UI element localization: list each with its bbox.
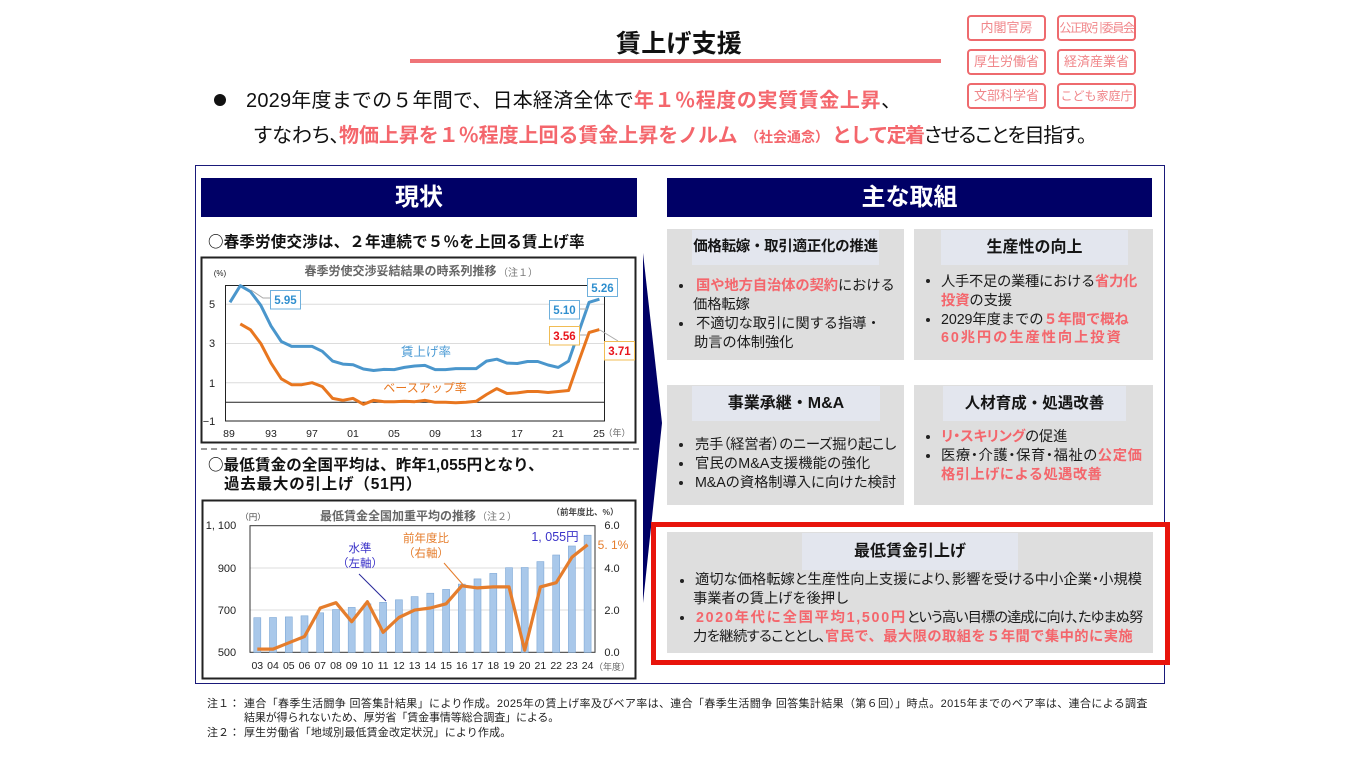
callout: 5.95: 5.95 xyxy=(274,295,297,307)
footnotes xyxy=(207,698,1148,738)
x axis labels: 03 xyxy=(251,660,263,672)
y axis labels xyxy=(203,269,227,428)
tag: education xyxy=(967,83,1046,109)
x axis labels: 10 xyxy=(362,660,373,672)
x axis labels: 06 xyxy=(299,660,310,672)
left axis labels: 700 xyxy=(218,605,236,617)
annotation: year-on-year, right axis: 前年度比 xyxy=(403,531,449,545)
lead line 2: （社会通念） xyxy=(745,129,829,145)
bullet xyxy=(926,435,930,439)
header: main initiatives: 主な取組 xyxy=(862,184,958,211)
x axis labels: 22 xyxy=(550,660,562,672)
note 2: 厚生労働省「地域別最低賃金改定状況」により作成。 xyxy=(244,726,511,738)
lead line 2: させることを目指す。 xyxy=(924,125,1085,147)
x axis labels: 21 xyxy=(535,660,546,672)
text: 格引上げによる処遇改善 xyxy=(941,467,1102,483)
x axis labels: 13 xyxy=(470,428,482,440)
x axis labels: 20 xyxy=(519,660,531,672)
line chart: spring wage negotiation results xyxy=(200,256,636,444)
panel heading xyxy=(941,230,1128,265)
bullet xyxy=(679,443,683,447)
panel heading: 最低賃金引上げ xyxy=(854,543,966,560)
x axis labels: 09 xyxy=(346,660,358,672)
x axis labels: 21 xyxy=(552,428,564,440)
panel heading xyxy=(943,386,1126,421)
y axis labels: −1 xyxy=(203,416,215,428)
x axis labels: 18 xyxy=(487,660,499,672)
callout: 5.95 xyxy=(270,290,300,309)
text: 60兆円の生産性向上投資 xyxy=(941,330,1123,346)
text: M&Aの資格制導入に向けた検討 xyxy=(695,475,896,491)
heading: minimum wage: ○最低賃金の全国平均は、昨年1,055円となり、 xyxy=(208,453,544,475)
x axis labels: 24 xyxy=(582,660,594,672)
text: 国や地方自治体の契約における xyxy=(696,278,895,294)
header: main initiatives xyxy=(667,178,1152,217)
x axis labels: 15 xyxy=(440,660,452,672)
title: 賃上げ支援 xyxy=(616,30,742,58)
x axis labels: 89 xyxy=(223,428,235,440)
note 1 continuation: 結果が得られないため、厚労省「賃金事情等総合調査」による。 xyxy=(244,712,559,724)
title underline xyxy=(410,59,941,63)
tag: health and labour xyxy=(967,49,1046,75)
bullet xyxy=(926,279,930,283)
x axis labels: （年） xyxy=(603,427,631,438)
heading: minimum wage: 過去最大の引上げ（51円） xyxy=(224,476,422,493)
x axis labels xyxy=(251,660,630,672)
panel: productivity xyxy=(914,229,1153,360)
bullet xyxy=(926,454,930,458)
panel heading xyxy=(802,533,1018,570)
panel heading: 生産性の向上 xyxy=(986,239,1082,256)
x axis labels: 05 xyxy=(388,428,400,440)
bullet xyxy=(679,481,683,485)
right axis labels: 0.0 xyxy=(604,647,620,659)
x axis labels: 19 xyxy=(503,660,515,672)
left axis labels xyxy=(206,520,236,659)
y axis labels: (%) xyxy=(214,269,227,278)
x axis labels: 25 xyxy=(593,428,605,440)
series: base-up rate xyxy=(240,324,599,404)
callout: 3.71 xyxy=(604,342,634,360)
x axis labels: 23 xyxy=(566,660,578,672)
text: 事業者の賃上げを後押し xyxy=(693,591,849,607)
lead statement xyxy=(214,90,1085,147)
callout: 5.10 xyxy=(550,300,580,319)
panel: human resources xyxy=(914,385,1153,505)
text: 力を継続することとし、官民で、最大限の取組を５年間で集中的に実施 xyxy=(693,629,1133,645)
x axis labels: 16 xyxy=(456,660,468,672)
annotation: level, left axis: （左軸） xyxy=(337,556,383,570)
left axis labels: 1, 100 xyxy=(206,520,236,532)
tag: economy and trade xyxy=(1057,49,1136,75)
header: current state: 現状 xyxy=(395,184,443,211)
tag: education: 文部科学省 xyxy=(974,88,1039,103)
chart title: （前年度比、%） xyxy=(551,507,619,517)
x axis labels: 17 xyxy=(511,428,523,440)
note 1: 注１： xyxy=(207,698,240,710)
heading: minimum wage xyxy=(208,453,544,493)
annotation: 5.1 percent: 5. 1% xyxy=(598,538,629,552)
series label: wage increase rate: 賃上げ率 xyxy=(401,344,451,359)
x axis labels: 13 xyxy=(409,660,421,672)
bullet xyxy=(679,322,683,326)
text: 2020年代に全国平均1,500円という高い目標の達成に向け、たゆまぬ努 xyxy=(696,610,1142,626)
annotation: 1,055 yen: 1, 055円 xyxy=(531,530,579,544)
series label: base-up rate: ベースアップ率 xyxy=(383,381,467,395)
tag: children and families xyxy=(1057,83,1136,109)
text: 医療・介護・保育・福祉の公定価 xyxy=(941,448,1142,464)
left axis labels: 500 xyxy=(218,647,236,659)
tag: cabinet secretariat: 内閣官房 xyxy=(980,20,1032,35)
x axis labels: 14 xyxy=(424,660,436,672)
panel: business succession xyxy=(667,385,904,505)
outer frame xyxy=(195,165,1165,684)
text: 投資の支援 xyxy=(941,293,1012,309)
chart title: （注１） xyxy=(498,266,538,279)
right axis labels: 6.0 xyxy=(604,520,620,532)
tag: health and labour: 厚生労働省 xyxy=(974,54,1039,69)
lead line 1: 2029年度までの５年間で、日本経済全体で年１％程度の実質賃金上昇、 xyxy=(246,90,901,112)
annotation: level, left axis: 水準 xyxy=(348,541,372,555)
bar and line chart: minimum wage trend xyxy=(202,500,636,680)
panel: price pass-through xyxy=(667,229,904,360)
x axis labels: 93 xyxy=(265,428,277,440)
panel heading: 価格転嫁・取引適正化の推進 xyxy=(693,239,878,255)
heading: spring wage negotiation: ○春季労使交渉は、２年連続で５％を上回る賃上げ率 xyxy=(208,230,585,252)
x axis labels: 04 xyxy=(267,660,279,672)
bullet xyxy=(679,462,683,466)
lead line 2: すなわち、 xyxy=(254,125,340,147)
annotation: level, left axis xyxy=(337,541,386,601)
x axis labels: 12 xyxy=(393,660,405,672)
x axis labels: 97 xyxy=(306,428,318,440)
x axis labels: 05 xyxy=(283,660,295,672)
callout: 5.10: 5.10 xyxy=(553,305,576,317)
tag: children and families: こども家庭庁 xyxy=(1060,89,1132,103)
note 2: 注２： xyxy=(207,726,240,738)
annotation: year-on-year, right axis xyxy=(403,531,465,587)
y axis labels: 5 xyxy=(209,299,215,311)
chart title xyxy=(240,507,619,523)
right axis labels: 2.0 xyxy=(604,605,620,617)
x axis labels: 09 xyxy=(429,428,441,440)
text: 価格転嫁 xyxy=(693,297,750,313)
x axis labels xyxy=(223,427,631,440)
x axis labels: 07 xyxy=(314,660,326,672)
text: 官民のM&A支援機能の強化 xyxy=(695,456,870,472)
tag: cabinet secretariat xyxy=(967,15,1046,41)
bars: minimum wage level xyxy=(254,535,591,652)
text: 適切な価格転嫁と生産性向上支援により、影響を受ける中小企業・小規模 xyxy=(695,572,1142,588)
series: wage increase rate xyxy=(230,286,599,370)
right axis labels xyxy=(604,520,620,659)
lead line 2: として定着 xyxy=(832,125,923,147)
chart title: （円） xyxy=(240,512,266,522)
panel heading: 人材育成・処遇改善 xyxy=(965,395,1104,412)
chart title: 春季労使交渉妥結結果の時系列推移 xyxy=(304,263,497,278)
lead line 2: 物価上昇を１％程度上回る賃金上昇をノルム xyxy=(339,125,738,147)
bullet xyxy=(679,284,683,288)
x axis labels: 17 xyxy=(472,660,483,672)
y axis labels: 1 xyxy=(209,378,215,390)
tag: fair trade commission: 公正取引委員会 xyxy=(1059,21,1134,35)
line: year-on-year change xyxy=(257,545,588,650)
tag: economy and trade: 経済産業省 xyxy=(1064,54,1129,69)
highlight box: minimum wage increase xyxy=(651,522,1170,665)
bullet xyxy=(680,616,684,620)
chart title: （注２） xyxy=(477,510,517,523)
arrow: current state to initiatives xyxy=(643,253,662,603)
chart title: 最低賃金全国加重平均の推移 xyxy=(320,508,476,523)
text: 2029年度までの５年間で概ね xyxy=(941,312,1129,328)
text: 不適切な取引に関する指導・ xyxy=(696,316,881,332)
x axis labels: 01 xyxy=(347,428,359,440)
tag: fair trade commission xyxy=(1057,15,1136,41)
left axis labels: 900 xyxy=(218,563,236,575)
leader lines xyxy=(251,290,618,341)
ministry tags xyxy=(967,15,1136,109)
lead line 2 xyxy=(254,124,1085,147)
callout: 3.56: 3.56 xyxy=(553,331,576,343)
text: リ・スキリングの促進 xyxy=(941,429,1067,445)
callout: 5.26 xyxy=(588,278,618,296)
panel: minimum wage increase xyxy=(667,532,1153,653)
text: 助言の体制強化 xyxy=(694,335,793,351)
text: 人手不足の業種における省力化 xyxy=(941,274,1137,290)
callout: 5.26: 5.26 xyxy=(591,283,614,295)
header: current state xyxy=(201,178,637,217)
x axis labels: 08 xyxy=(330,660,342,672)
bullet marker xyxy=(214,94,226,106)
bullet xyxy=(926,318,930,322)
annotation: year-on-year, right axis: （右軸） xyxy=(403,546,449,560)
y axis labels: 3 xyxy=(209,338,215,350)
panel heading xyxy=(692,230,879,265)
panel heading: 事業承継・M&A xyxy=(728,395,844,412)
bullet xyxy=(680,579,684,583)
note 1: 連合「春季生活闘争 回答集計結果」により作成。2025年の賃上げ率及びベア率は、連合「春季生活闘争 回答集計結果（第６回）」時点。2015年までのベア率は、連合による調査 xyxy=(244,698,1148,710)
right axis labels: 4.0 xyxy=(604,563,620,575)
x axis labels: （年度） xyxy=(594,661,630,672)
callout: 3.71: 3.71 xyxy=(608,346,631,358)
text: 売手（経営者）のニーズ掘り起こし xyxy=(695,437,896,453)
panel heading xyxy=(692,386,880,421)
callout: 3.56 xyxy=(550,326,580,345)
x axis labels: 11 xyxy=(378,660,389,672)
